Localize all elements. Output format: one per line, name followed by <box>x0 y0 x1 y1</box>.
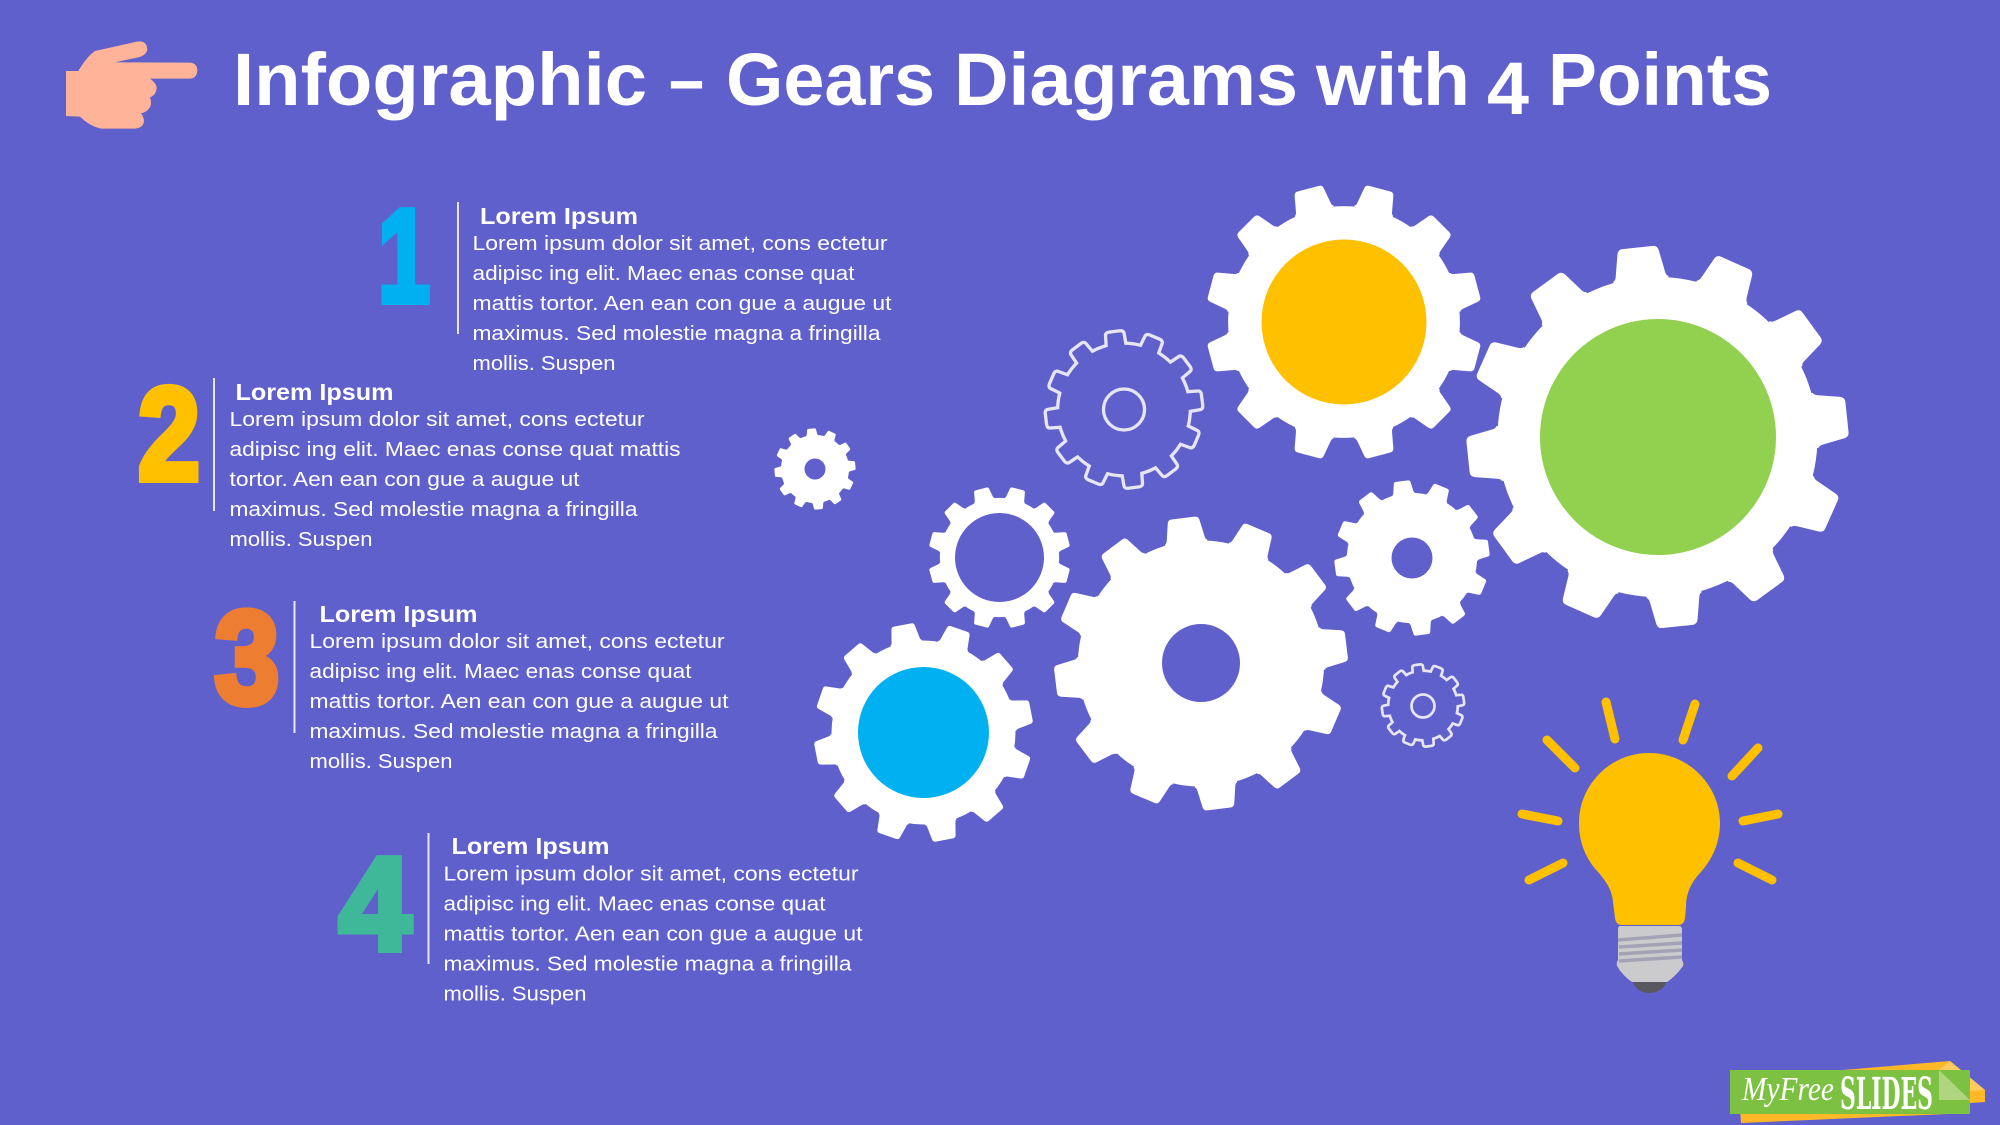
logo green banner <box>1730 1070 1970 1114</box>
body text 1: mollis. Suspen <box>472 352 616 375</box>
icon: light bulb <box>1522 702 1778 993</box>
number 2: 2 <box>138 360 200 508</box>
panel: point 4 <box>339 830 863 1006</box>
icon: pointing hand <box>66 41 197 129</box>
body text 1: adipisc ing elit. Maec enas conse quat <box>472 262 855 285</box>
body text 3: mattis tortor. Aen ean con gue a augue ut <box>310 690 729 713</box>
body text 2: Lorem ipsum dolor sit amet, cons ectetur <box>230 408 645 431</box>
divider 4 <box>428 833 430 964</box>
title: Gears <box>726 38 935 121</box>
heading 3: Lorem Ipsum <box>320 601 478 627</box>
body text 2: mollis. Suspen <box>230 528 372 551</box>
bulb thread lines <box>1618 935 1682 961</box>
body text 3: adipisc ing elit. Maec enas conse quat <box>310 660 692 683</box>
heading 4: Lorem Ipsum <box>452 833 610 859</box>
bulb rays <box>1522 702 1778 880</box>
logo script text: MyFree <box>1741 1071 1834 1108</box>
body text 2: adipisc ing elit. Maec enas conse quat mattis <box>230 438 680 461</box>
gear: small white <box>771 425 859 513</box>
gear: green centre <box>1448 228 1867 646</box>
gear: medium white <box>1325 471 1499 645</box>
panel: point 3 <box>214 584 729 773</box>
gear: small outline <box>1378 661 1468 750</box>
body text 1 <box>472 232 892 375</box>
gear: large outline <box>1038 324 1210 495</box>
divider 3 <box>294 601 296 733</box>
title: Diagrams <box>954 38 1298 121</box>
body text 1: mattis tortor. Aen ean con gue a augue ut <box>472 292 892 315</box>
gear: white ring <box>913 471 1086 644</box>
gear: large white centre <box>1038 500 1364 827</box>
bulb glass <box>1579 753 1720 925</box>
title: with <box>1315 38 1470 121</box>
title: Infographic <box>233 38 647 121</box>
logo green fold <box>1939 1070 1970 1100</box>
bulb contact <box>1632 980 1667 993</box>
title: – <box>669 38 704 121</box>
bulb screw base <box>1617 926 1683 982</box>
title: Points <box>1548 38 1772 121</box>
gear: blue centre <box>795 604 1052 861</box>
body text 2: tortor. Aen ean con gue a augue ut <box>230 468 580 491</box>
logo orange ribbon <box>1740 1061 1985 1123</box>
body text 3: mollis. Suspen <box>310 750 452 773</box>
body text 4: mollis. Suspen <box>444 982 586 1006</box>
number 4: 4 <box>339 830 411 978</box>
body text 3: Lorem ipsum dolor sit amet, cons ectetur <box>310 630 725 653</box>
number 1: 1 <box>378 182 430 330</box>
divider 2 <box>213 378 215 511</box>
body text 3 <box>310 630 729 773</box>
body text 1: Lorem ipsum dolor sit amet, cons ectetur <box>472 232 888 255</box>
heading 2: Lorem Ipsum <box>236 379 394 405</box>
gear: yellow centre <box>1175 153 1513 491</box>
body text 4 <box>444 862 863 1006</box>
panel: point 1 <box>378 182 892 375</box>
logo: MyFreeSlides <box>1730 1061 1985 1123</box>
panel: point 2 <box>138 360 680 551</box>
body text 2 <box>230 408 680 551</box>
number 3: 3 <box>214 584 280 731</box>
logo fold <box>1939 1061 1985 1092</box>
body text 1: maximus. Sed molestie magna a fringilla <box>472 322 881 345</box>
body text 4: Lorem ipsum dolor sit amet, cons ectetur <box>444 862 859 886</box>
title: 4 <box>1487 47 1529 130</box>
body text 3: maximus. Sed molestie magna a fringilla <box>310 720 718 743</box>
body text 4: adipisc ing elit. Maec enas conse quat <box>444 892 826 916</box>
body text 4: maximus. Sed molestie magna a fringilla <box>444 952 852 976</box>
divider 1 <box>457 202 459 334</box>
heading 1: Lorem Ipsum <box>480 203 638 229</box>
title <box>233 38 1772 130</box>
body text 4: mattis tortor. Aen ean con gue a augue ut <box>444 922 863 946</box>
body text 2: maximus. Sed molestie magna a fringilla <box>230 498 638 521</box>
